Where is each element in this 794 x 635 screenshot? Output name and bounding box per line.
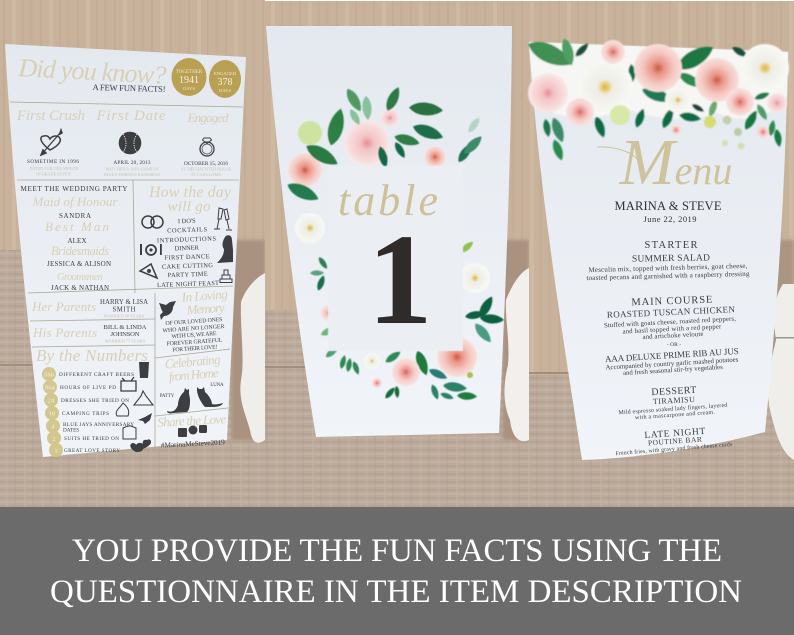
- menu: main course: - OR -: [667, 342, 681, 348]
- section: wedding party: Best Man: [45, 219, 109, 234]
- icon: two hearts: [130, 439, 151, 452]
- section: how the day will go: PARTY TIME: [168, 271, 208, 279]
- couple names and date: [614, 199, 722, 224]
- badge: together 1941 days: DAYS: [183, 86, 195, 91]
- stat: 24 dresses: DRESSES SHE TRIED ON: [61, 398, 129, 404]
- fact: engaged: [181, 110, 232, 177]
- banner: caption: YOU PROVIDE THE FUN FACTS USING THE: [72, 533, 722, 569]
- stat: 4 blue jays dates: BLUE JAYS ANNIVERSARY: [63, 422, 134, 428]
- fact: first date: APRIL 20, 2013: [114, 160, 151, 166]
- menu: starter: STARTER: [644, 240, 698, 251]
- section: in loving memory: [159, 286, 229, 354]
- stat: 1 great love story: [49, 443, 120, 457]
- section: in loving memory: WITH US, WE ARE: [171, 331, 217, 340]
- section: her parents: [31, 299, 148, 318]
- section: in loving memory: FOREVER GRATEFUL: [166, 338, 223, 347]
- icon: baseball: [119, 132, 141, 154]
- panel: table number card: [266, 26, 512, 437]
- fact: first crush: DATED FOR ONE MONTH: [30, 166, 78, 171]
- section: wedding party: MEET THE WEDDING PARTY: [20, 185, 128, 193]
- fact: engaged: AT CASA LOMA: [191, 172, 221, 177]
- stat: 4 blue jays dates: DATES: [63, 428, 79, 434]
- badge: engaged 378 days: DAYS: [219, 88, 231, 93]
- section: in loving memory: In Loving: [180, 286, 229, 305]
- menu: starter: [586, 240, 750, 282]
- menu: main course: and artichoke veloute: [642, 331, 704, 341]
- icon: dove: [159, 301, 176, 320]
- icon: suit: [123, 426, 136, 439]
- white flower behind left card: [240, 273, 265, 443]
- icon: dancing couple: [217, 235, 233, 263]
- section: in loving memory: FOR THEIR LOVE!: [172, 344, 218, 354]
- fact: first date: First Date: [96, 108, 166, 124]
- section: share the love: #MarinaMeSteve2019: [161, 437, 225, 450]
- heading: menu: Menu: [619, 126, 732, 199]
- heading: did you know: A FEW FUN FACTS!: [92, 82, 166, 94]
- badge: engaged 378 days: 378: [218, 77, 232, 88]
- word: table: table: [338, 176, 438, 225]
- badge: together 1941 days: 1941: [179, 75, 199, 86]
- section: in loving memory: Memory: [185, 300, 225, 317]
- section: his parents: His Parents: [32, 325, 97, 340]
- badge: together 1941 days: [172, 58, 206, 96]
- panel: menu card: [524, 36, 789, 460]
- stat: 2 suits: [47, 431, 119, 445]
- section: her parents: MARRIED 40 YEARS: [104, 314, 145, 318]
- menu: dessert: DESSERT: [651, 385, 697, 398]
- floral wreath: [285, 85, 504, 401]
- stat: 964 hours of live pd: 964: [45, 384, 56, 392]
- section: wedding party: Groomsmen: [57, 272, 103, 283]
- floral garland: [524, 36, 789, 162]
- section: celebrating from home: from Home: [168, 365, 219, 384]
- section: wedding party: [20, 185, 128, 292]
- menu: late night: French fries, with gravy and fresh cheese curds: [615, 441, 733, 457]
- section: how the day will go: How the day: [148, 184, 232, 201]
- icon: wedding rings: [142, 216, 163, 228]
- stat: 4 blue jays dates: [46, 419, 134, 434]
- menu: main course: Accompanied by country garlic mashed potatoes: [605, 356, 739, 372]
- section: celebrating from home: PATTY: [160, 394, 175, 399]
- section: her parents: Her Parents: [31, 299, 96, 314]
- menu: main course: and basil topped with a red pepper: [622, 323, 722, 336]
- icon: blue jay: [138, 413, 152, 424]
- menu: dessert: [618, 385, 728, 421]
- section: how the day will go: will go: [168, 199, 211, 215]
- badge: engaged 378 days: [209, 60, 241, 98]
- section: how the day will go: COCKTAILS: [167, 226, 208, 235]
- icon: heart with arrow: [41, 130, 62, 155]
- icon: beer glass: [139, 362, 149, 378]
- icon: champagne glasses: [214, 208, 232, 230]
- menu: main course: Stuffed with goats cheese, roasted red peppers,: [604, 316, 736, 329]
- background: middle photo panel: [265, 1, 529, 507]
- icon: pizza slice: [140, 264, 157, 278]
- stat: 24 dresses: [44, 393, 129, 407]
- icon: wedding cake: [220, 270, 232, 282]
- section: how the day will go: I DO'S: [178, 218, 196, 225]
- section: wedding party: SANDRA: [59, 212, 91, 220]
- section: his parents: [32, 324, 147, 344]
- section: how the day will go: CAKE CUTTING: [162, 262, 213, 271]
- section: share the love: Share the Love: [157, 411, 227, 430]
- menu: late night: [615, 427, 733, 457]
- table number 1: 1: [368, 208, 432, 352]
- fact: first crush: [16, 108, 85, 176]
- stat: 4 blue jays dates: 4: [51, 424, 55, 430]
- fact: engaged: AT THE HAUNTED HOUSE: [181, 166, 232, 172]
- section: wedding party: ALEX: [68, 237, 86, 245]
- fact: first crush: First Crush: [16, 108, 85, 124]
- menu: dessert: with a mascarpone and cream.: [635, 410, 716, 421]
- section: celebrating from home: LUNA: [210, 383, 224, 388]
- background: left photo panel: [0, 0, 265, 507]
- section: how the day will go: LATE NIGHT FEAST: [157, 280, 219, 289]
- section: in loving memory: OF OUR LOVED ONES: [165, 317, 223, 327]
- stat: 2 suits: SUITS HE TRIED ON: [64, 436, 119, 442]
- section: wedding party: JESSICA & ALISON: [47, 260, 111, 268]
- fact: first date: WATCHED A JAYS GAME IN: [105, 166, 159, 172]
- section: wedding party: JACK & NATHAN: [51, 284, 109, 292]
- menu: main course: MAIN COURSE: [631, 295, 713, 308]
- fact: first date: [96, 108, 166, 177]
- section: her parents: SMITH: [112, 306, 136, 314]
- couple names and date: June 22, 2019: [644, 214, 696, 224]
- section: his parents: MARRIED 75 YEARS: [105, 338, 146, 344]
- section: by the numbers: [36, 346, 153, 457]
- fact: first date: PAUL'S PARENTS BASEMENT: [104, 172, 161, 177]
- section: by the numbers: By the Numbers: [36, 346, 148, 365]
- menu: main course: [604, 295, 739, 377]
- menu: dessert: Mild espresso soaked lady fingers, layered: [618, 402, 728, 416]
- section: how the day will go: FIRST DANCE: [164, 253, 210, 262]
- section: how the day will go: INTRODUCTIONS: [157, 235, 217, 245]
- menu: late night: POUTINE BAR: [648, 435, 702, 447]
- fact: engaged: OCTOBER 15, 2016: [184, 161, 228, 167]
- menu: main course: ROASTED TUSCAN CHICKEN: [607, 304, 736, 320]
- icon: diamond ring: [200, 138, 214, 156]
- stat: 566 craft beers: [42, 367, 134, 381]
- menu: starter: Mesculin mix, topped with fresh berries, goat cheese,: [588, 262, 748, 274]
- stat: 964 hours of live pd: HOURS OF LIVE PD: [60, 385, 116, 391]
- stat: 964 hours of live pd: [43, 380, 116, 394]
- banner: caption: QUESTIONNAIRE IN THE ITEM DESCRIPTION: [50, 574, 742, 610]
- stat: 10 camping trips: 10: [49, 410, 55, 418]
- dividers: [10, 102, 243, 451]
- section: wedding party: Bridesmaids: [51, 244, 109, 258]
- section: wedding party: Maid of Honour: [32, 194, 118, 209]
- stat: 566 craft beers: 566: [44, 372, 55, 378]
- menu: main course: and fresh seasonal stir-fry vegetables: [623, 364, 723, 377]
- icon: cat patty: [167, 388, 190, 413]
- icon: social media: [178, 425, 207, 437]
- section: his parents: BILL & LINDA: [104, 324, 147, 331]
- couple names and date: MARINA & STEVE: [614, 199, 722, 213]
- section: how the day will go: [140, 184, 233, 289]
- icon: campfire: [116, 403, 129, 416]
- section: celebrating from home: [160, 352, 224, 413]
- stat: 24 dresses: 24: [48, 398, 55, 404]
- section: how the day will go: DINNER: [175, 245, 200, 252]
- icon: place setting: [140, 244, 162, 255]
- menu: starter: SUMMER SALAD: [632, 253, 710, 265]
- stat: 1 great love story: 1: [54, 448, 58, 454]
- panel: fun facts card: [5, 44, 246, 457]
- icon: wedding dress: [134, 391, 153, 405]
- white flower behind right card: [768, 284, 794, 460]
- fact: first crush: IN GRADE SEVEN.: [36, 172, 72, 176]
- white flower behind middle card: [504, 268, 529, 441]
- menu: starter: toasted pecans and garnished with a raspberry dressing: [586, 270, 750, 282]
- stat: 2 suits: 2: [52, 436, 56, 442]
- icon: television: [121, 377, 136, 391]
- section: in loving memory: WHO ARE NO LONGER: [162, 324, 225, 334]
- fact: first crush: SOMETIME IN 1996: [27, 159, 79, 165]
- section: her parents: HARRY & LISA: [100, 299, 148, 306]
- icon: cat luna: [197, 387, 223, 407]
- menu: late night: LATE NIGHT: [644, 427, 706, 441]
- section: celebrating from home: Celebrating: [164, 352, 222, 371]
- stat: 566 craft beers: DIFFERENT CRAFT BEERS: [59, 372, 134, 378]
- menu: dessert: TIRAMISU: [653, 395, 695, 406]
- table word panel knockout: [328, 166, 463, 351]
- stat: 1 great love story: GREAT LOVE STORY: [64, 448, 120, 454]
- background: right photo panel: [529, 1, 794, 507]
- section: his parents: JOHNSON: [110, 331, 140, 338]
- fact: engaged: Engaged: [186, 110, 229, 125]
- badge: together 1941 days: TOGETHER: [176, 70, 203, 75]
- stat: 10 camping trips: CAMPING TRIPS: [62, 411, 109, 417]
- section: share the love: [157, 411, 227, 450]
- banner: caption: [0, 507, 794, 635]
- heading: did you know: Did you know?: [17, 53, 167, 90]
- badge: engaged 378 days: ENGAGED: [214, 71, 237, 76]
- stat: 10 camping trips: [45, 406, 109, 420]
- menu: main course: AAA DELUXE PRIME RIB AU JUS: [605, 346, 739, 364]
